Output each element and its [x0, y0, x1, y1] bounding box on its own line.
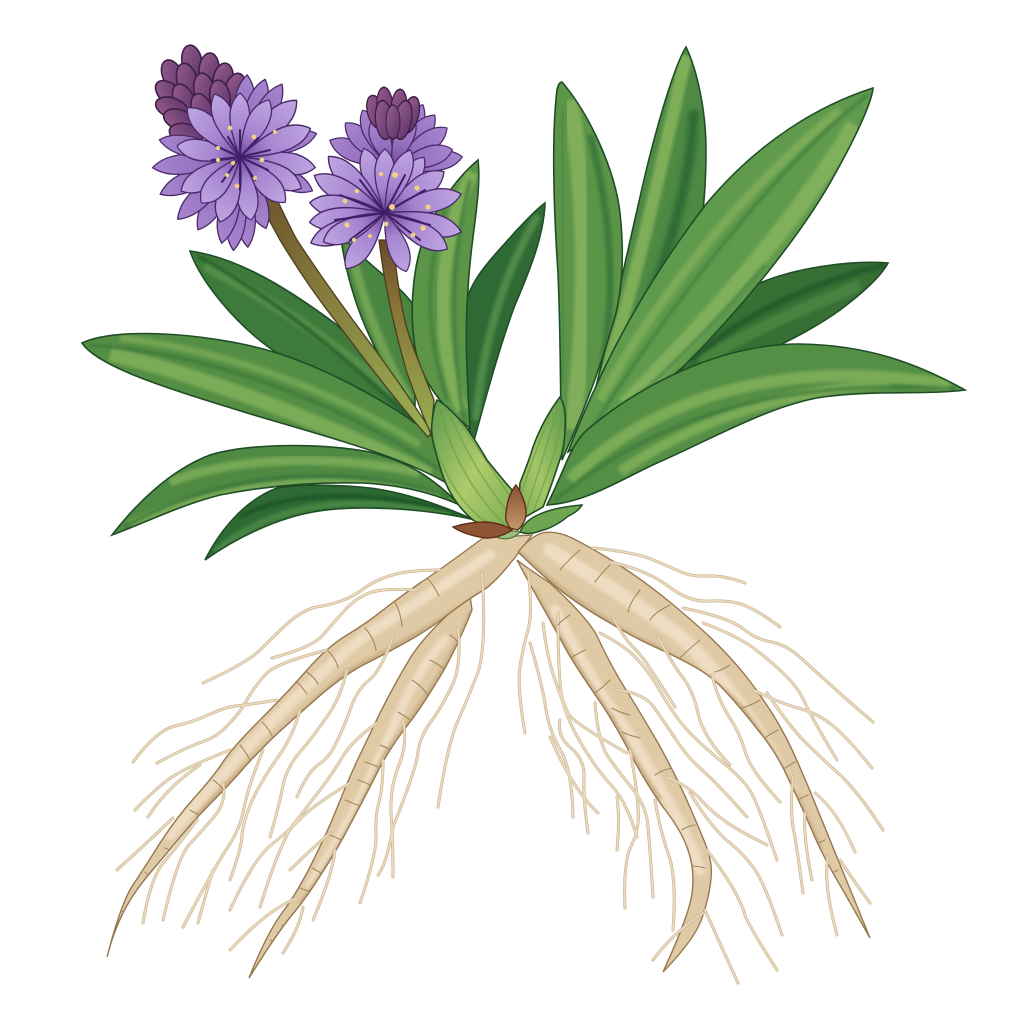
- stem: right flower: [379, 240, 434, 434]
- bud scale: horizontal: [453, 522, 512, 538]
- leaf: dark far right: [680, 262, 888, 372]
- petals: [307, 145, 464, 275]
- basal shoot: [432, 397, 582, 539]
- leaf: tall centre right: [595, 46, 707, 386]
- stamens: [216, 126, 277, 188]
- leaf: dark upper left: [188, 250, 413, 420]
- leaf: dark lower left: [205, 485, 475, 560]
- leaf: left middle: [112, 446, 460, 535]
- stem: left flower: [253, 185, 432, 437]
- root creases: [120, 550, 838, 944]
- flower: right: [307, 145, 464, 275]
- leaf: broad upper right: [568, 88, 873, 452]
- root: far left: [107, 535, 532, 957]
- leaf: back dark left of centre: [462, 203, 545, 448]
- sprout leaf: left: [432, 400, 512, 528]
- leaf: upright centre: [554, 82, 622, 460]
- back petals: [151, 74, 319, 251]
- bud scale: upright: [506, 485, 526, 530]
- leaf: long right: [547, 344, 965, 505]
- root: lower left: [249, 595, 472, 978]
- stamens: [343, 172, 431, 242]
- flower stems: [253, 130, 434, 437]
- leaf: far left long: [82, 334, 448, 484]
- thin rootlets: [117, 548, 883, 983]
- centre rays: [335, 175, 430, 240]
- centre rays: [212, 130, 270, 190]
- flower: right back petals: [326, 100, 464, 178]
- flower: left: [151, 74, 319, 251]
- sprout leaf: small base: [497, 531, 520, 539]
- flower: right bud cluster: [363, 87, 423, 141]
- front petals: [175, 90, 317, 225]
- flower: left bud cluster: [151, 44, 249, 148]
- stem: right flower upper: [388, 130, 397, 180]
- back leaves: [82, 47, 965, 560]
- root: far right: [518, 532, 870, 938]
- sprout leaf: right: [520, 397, 565, 520]
- sprout leaf: small right: [520, 505, 582, 533]
- taproots: [107, 532, 870, 978]
- leaf: upright back: [340, 232, 415, 410]
- leaf: upright tall: [412, 160, 479, 428]
- root: lower centre right: [517, 560, 711, 972]
